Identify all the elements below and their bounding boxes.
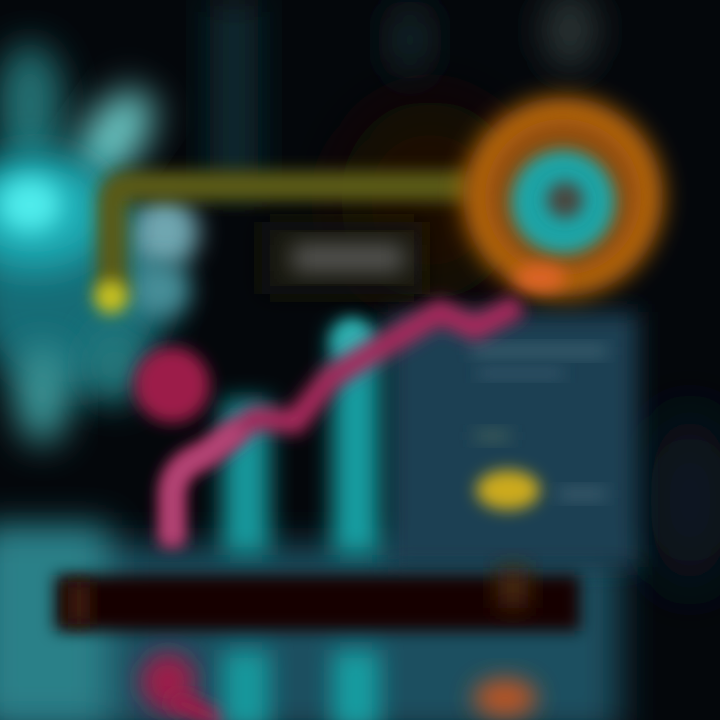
background haze <box>210 0 720 590</box>
dark bar <box>55 568 580 631</box>
icon: yellow blob <box>476 470 540 510</box>
panel: right information card <box>388 312 638 567</box>
panel: bottom teal band <box>0 525 620 720</box>
lower reflections <box>140 650 537 720</box>
label: blurred grey heading <box>262 222 422 294</box>
icon: yellow dot <box>94 280 128 314</box>
icon: crimson circle <box>134 347 210 423</box>
icon: orange ring target <box>463 97 663 297</box>
icon: glowing flower <box>0 43 199 445</box>
connector line: yellow <box>112 186 470 295</box>
line chart: trend line <box>172 305 520 545</box>
bar chart: teal bars <box>222 318 380 555</box>
